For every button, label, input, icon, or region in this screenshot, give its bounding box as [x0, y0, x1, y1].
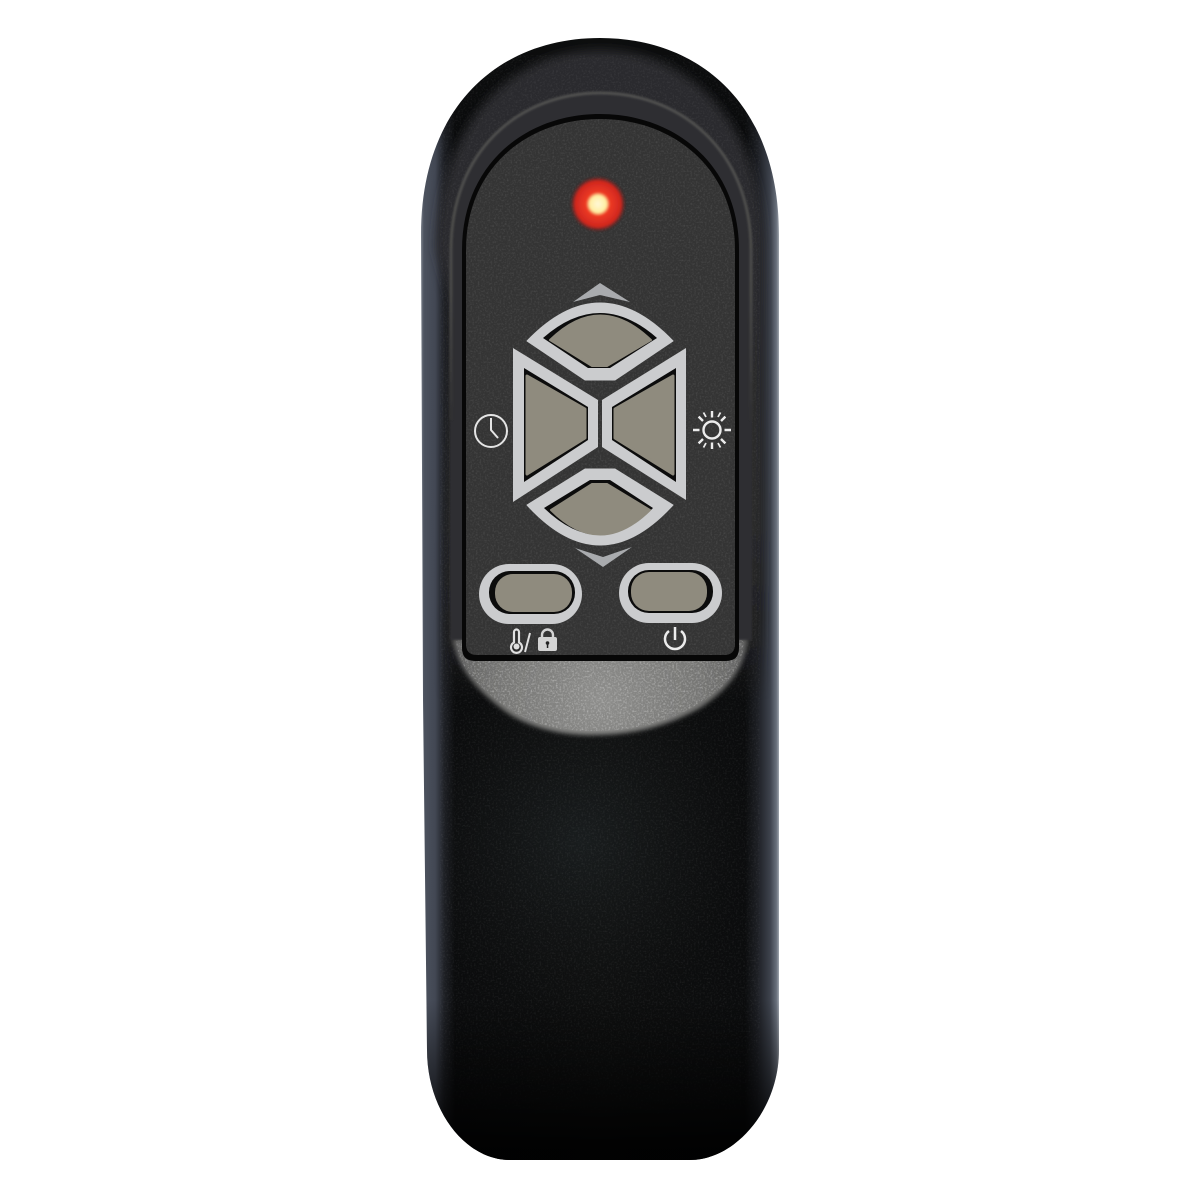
slash separator: [525, 633, 530, 652]
button: down: [527, 469, 673, 545]
button: left: [513, 348, 598, 502]
face panel: [462, 114, 739, 661]
icon: lock: [538, 630, 557, 651]
grey textured thumb grip: [452, 636, 748, 735]
icon: thermometer: [511, 630, 522, 653]
button: power: [619, 563, 722, 623]
remote body shell: [415, 30, 785, 1165]
icon: clock: [475, 415, 507, 447]
raised bezel around face panel: [450, 92, 752, 640]
red indicator LED: [570, 176, 626, 232]
icon: brightness sun: [693, 411, 731, 449]
arrow: down: [575, 547, 632, 567]
button: temperature and lock: [479, 564, 582, 624]
remote control: [415, 30, 785, 1165]
button: right: [602, 348, 686, 500]
arrow: up: [573, 283, 630, 302]
button: up: [527, 303, 673, 380]
icon: power: [665, 627, 685, 649]
